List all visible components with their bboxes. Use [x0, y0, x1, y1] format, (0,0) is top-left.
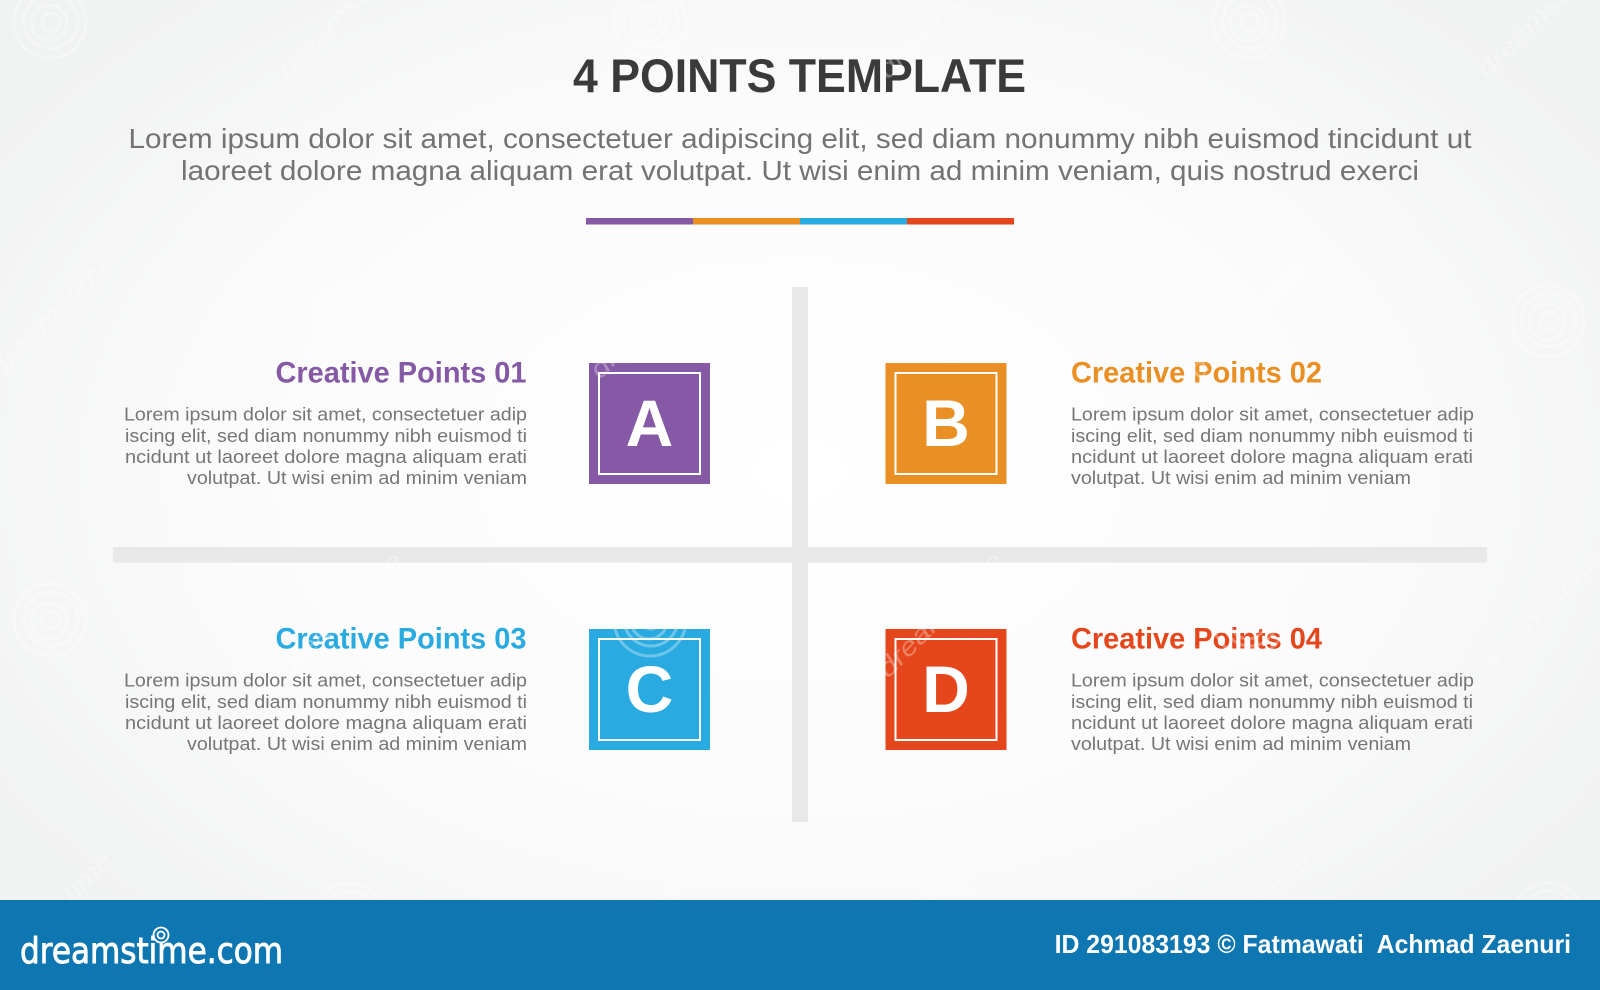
body text 02 [1071, 405, 1474, 488]
subtitle: laoreet dolore magna aliquam erat volutpat. Ut wisi enim ad minim veniam, quis nostrud exerci [181, 155, 1419, 186]
body text 01 [124, 405, 527, 488]
badge C [589, 629, 710, 750]
badge B: B [922, 386, 970, 460]
logo spiral [154, 928, 168, 942]
panel: creative points 04 [886, 622, 1474, 754]
body text 03: iscing elit, sed diam nonummy nibh euismod ti [125, 692, 527, 712]
body text 04: ncidunt ut laoreet dolore magna aliquam erati [1071, 713, 1473, 733]
heading 03: Creative Points 03 [276, 622, 526, 656]
heading 01: Creative Points 01 [276, 356, 526, 390]
body text 04: iscing elit, sed diam nonummy nibh euismod ti [1071, 692, 1473, 712]
body text 04 [1071, 671, 1474, 754]
body text 03: Lorem ipsum dolor sit amet, consectetuer adip [124, 671, 527, 691]
body text 01: ncidunt ut laoreet dolore magna aliquam erati [125, 447, 527, 467]
watermark: spirals and text: dreamstime [583, 246, 721, 384]
body text 01: volutpat. Ut wisi enim ad minim veniam [187, 468, 527, 488]
body text 03 [124, 671, 527, 754]
body text 02: iscing elit, sed diam nonummy nibh euismod ti [1071, 426, 1473, 446]
body text 02: volutpat. Ut wisi enim ad minim veniam [1071, 468, 1411, 488]
badge B [886, 363, 1006, 484]
watermark: spirals and text: dreamstime [271, 545, 409, 683]
body text 03: volutpat. Ut wisi enim ad minim veniam [187, 734, 527, 754]
heading 02: Creative Points 02 [1071, 356, 1322, 390]
panel: creative points 02 [886, 356, 1474, 488]
footer credit: ID 291083193 © Fatmawati Achmad Zaenuri [1055, 929, 1571, 959]
subtitle: Lorem ipsum dolor sit amet, consectetuer adipiscing elit, sed diam nonummy nibh euismod tincidunt ut [128, 123, 1472, 154]
panel: creative points 01 [124, 356, 710, 488]
badge D [886, 629, 1006, 750]
subtitle [128, 123, 1472, 186]
title: 4 POINTS TEMPLATE [573, 49, 1026, 102]
panel: creative points 03 [124, 622, 710, 754]
colour divider bar [586, 218, 1014, 224]
body text 02: ncidunt ut laoreet dolore magna aliquam erati [1071, 447, 1473, 467]
heading 04: Creative Points 04 [1071, 622, 1322, 656]
body text 02: Lorem ipsum dolor sit amet, consectetuer adip [1071, 405, 1474, 425]
badge D: D [922, 652, 970, 726]
footer logo: dreamstime.com [20, 931, 283, 972]
watermark: spirals and text: dreamstime [1182, 246, 1320, 384]
body text 03: ncidunt ut laoreet dolore magna aliquam erati [125, 713, 527, 733]
body text 04: Lorem ipsum dolor sit amet, consectetuer adip [1071, 671, 1474, 691]
body text 01: Lorem ipsum dolor sit amet, consectetuer adip [124, 405, 527, 425]
watermark: spirals and text: dreamstime [581, 844, 719, 982]
badge A: A [626, 386, 673, 460]
footer band [0, 900, 1600, 990]
badge C: C [626, 652, 673, 726]
watermark: spirals and text: dreamstime [1470, 545, 1600, 683]
body text 04: volutpat. Ut wisi enim ad minim veniam [1071, 734, 1411, 754]
watermark: spirals and text: dreamstime [871, 545, 1009, 683]
quadrant cross divider [113, 287, 1487, 822]
badge A [589, 363, 710, 484]
body text 01: iscing elit, sed diam nonummy nibh euismod ti [125, 426, 527, 446]
watermark: spirals and text: dreamstime [1180, 844, 1318, 982]
